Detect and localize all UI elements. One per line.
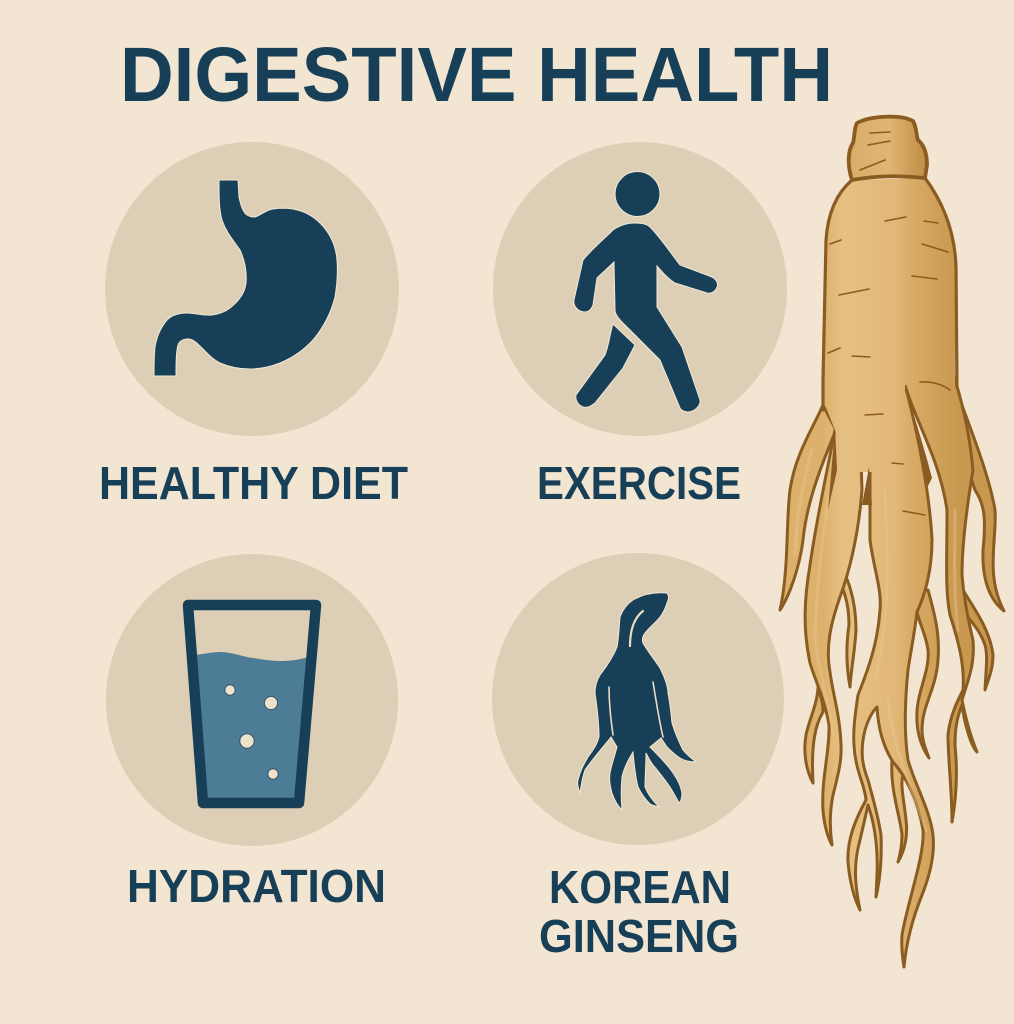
panel: exercise <box>493 142 787 509</box>
panel: healthy diet <box>99 142 408 509</box>
person head <box>615 172 660 216</box>
glass outline <box>188 605 316 803</box>
panel: hydration <box>106 554 398 912</box>
bubbles <box>225 685 278 779</box>
panel: korean ginseng <box>492 553 784 962</box>
title: DIGESTIVE HEALTH <box>120 32 833 118</box>
icon: stomach <box>154 180 337 376</box>
person back leg <box>576 324 635 407</box>
root highlights <box>795 450 958 830</box>
icon: glass of water <box>188 605 316 803</box>
icon: walking person <box>574 172 717 412</box>
circle: korean ginseng <box>492 553 784 845</box>
label: korean ginseng <box>539 861 739 962</box>
water <box>194 652 309 802</box>
label line: korean: KOREAN <box>549 861 731 913</box>
body side outlines <box>823 178 957 410</box>
body fill <box>823 178 956 472</box>
circle: healthy diet <box>105 142 399 436</box>
circle: exercise <box>493 142 787 436</box>
person body and front leg <box>574 223 717 412</box>
highlight slits <box>609 611 663 737</box>
circle: hydration <box>106 554 398 846</box>
crown <box>849 117 927 180</box>
rootlets <box>780 370 1004 967</box>
label: exercise: EXERCISE <box>537 457 741 509</box>
label: hydration: HYDRATION <box>127 860 386 912</box>
label line: ginseng: GINSENG <box>539 910 739 962</box>
icon: ginseng silhouette <box>578 593 696 810</box>
illustration: ginseng root <box>780 117 1004 967</box>
label: healthy diet: HEALTHY DIET <box>99 457 408 509</box>
silhouette <box>578 593 696 810</box>
creases <box>828 132 950 515</box>
dark slits between roots <box>828 385 932 510</box>
